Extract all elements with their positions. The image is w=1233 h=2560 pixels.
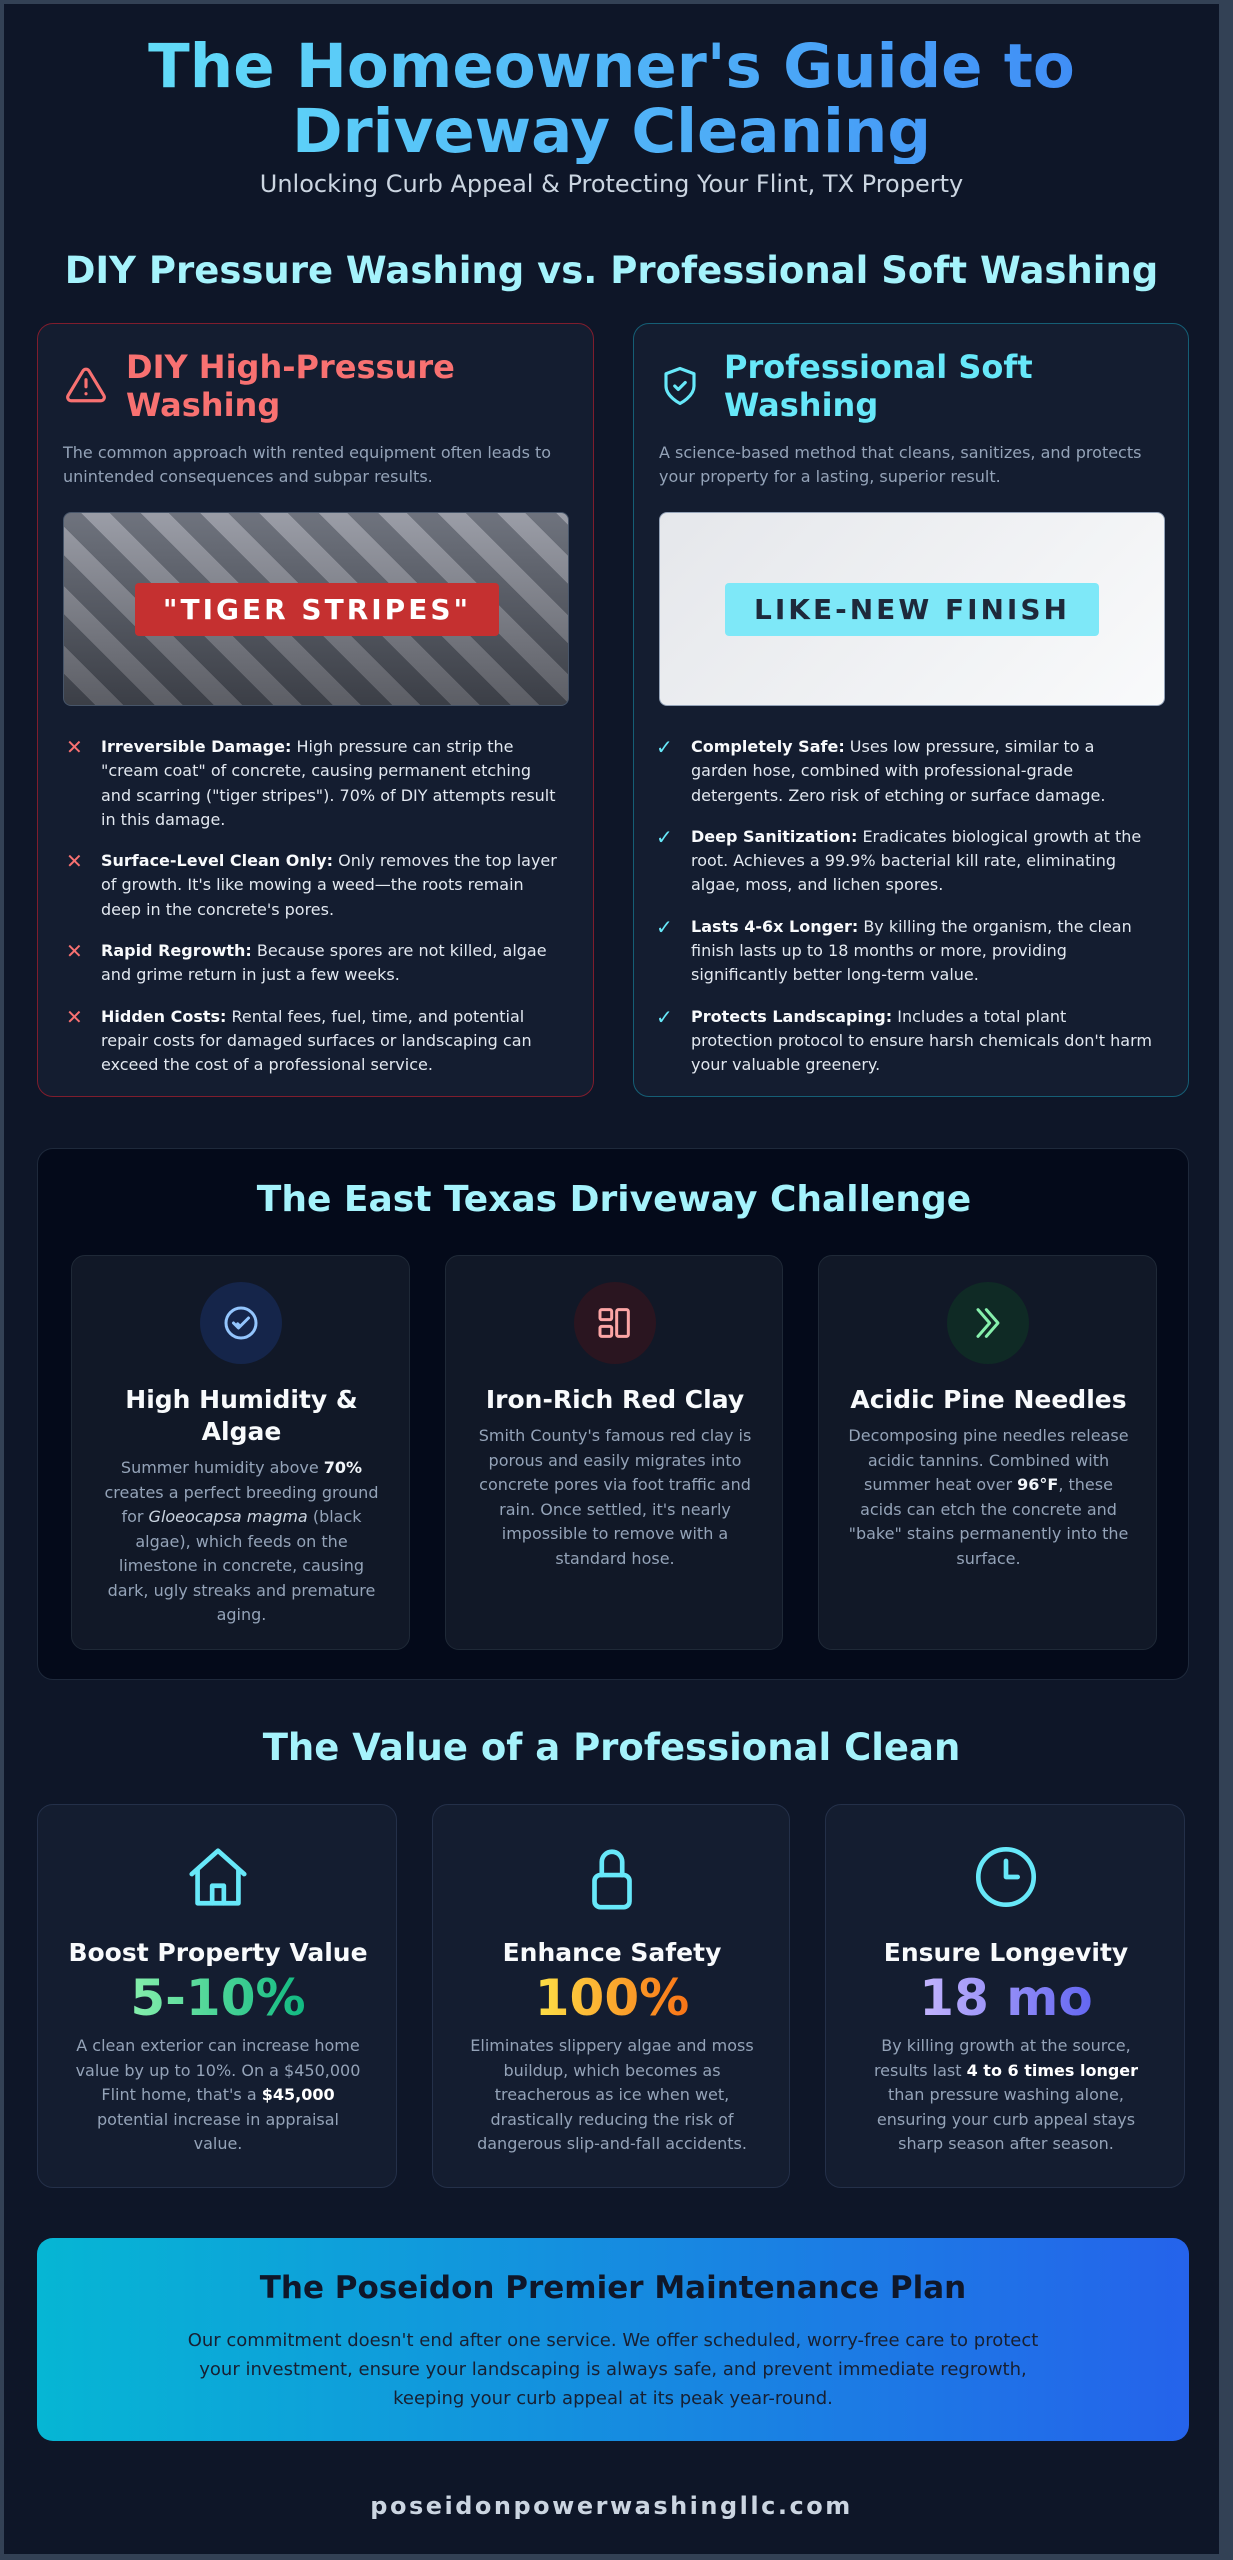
bullet: hidden costs: exceed the cost of a professional service. [101, 1055, 433, 1074]
icon: warning [66, 368, 106, 402]
bullet: protects landscaping: your valuable greenery. [691, 1055, 880, 1074]
callout: maintenance plan [37, 2238, 1189, 2441]
panel: DIY high-pressure washing [37, 323, 594, 1097]
bullet: surface clean: Surface-Level Clean Only: Only removes the top layer [101, 851, 557, 870]
card: red clay [445, 1255, 783, 1650]
text: property value: potential increase in appraisal [97, 2110, 339, 2128]
heading: DIY [126, 348, 455, 424]
title: humidity [125, 1385, 358, 1446]
bullet: deep sanitization: Deep Sanitization: Eradicates biological growth at the [691, 827, 1141, 846]
text: longevity: ensuring your curb appeal stays [877, 2110, 1135, 2128]
heading: professional [724, 348, 1033, 424]
icon: clock [976, 1847, 1036, 1907]
text: pine needles: Decomposing pine needles release acidic tannins. Combined with summer heat over 96°F, these acids can etch the concrete and "bake" stains permanently into the surface. [848, 1426, 1129, 1568]
bullet: surface clean: ✕ [66, 849, 83, 873]
icon: check circle [200, 1282, 282, 1364]
bullet: protects landscaping [656, 1005, 1152, 1074]
card: safety [432, 1804, 790, 2188]
bullet: rapid regrowth: ✕ [66, 939, 83, 963]
title: property value: Boost Property Value [68, 1938, 368, 1967]
list: professional benefits [656, 735, 1152, 1074]
label: tiger stripes: "TIGER STRIPES" [163, 593, 471, 626]
title: humidity: High Humidity & [125, 1385, 358, 1414]
bullet: completely safe: detergents. Zero risk of etching or surface damage. [691, 786, 1105, 805]
bullet: surface clean: deep in the concrete's pores. [101, 900, 334, 919]
title: safety: Enhance Safety [503, 1938, 721, 1967]
text: maintenance plan: Our commitment doesn't end after one service. We offer scheduled, worry-free care to protect your investment, ensure your landscaping is always safe, and prevent immediate regrowth, keeping your curb appeal at its peak year-round. [188, 2330, 1038, 2409]
text: property value: A clean exterior can increase home [76, 2036, 360, 2055]
bullet: completely safe: Completely Safe: Uses low pressure, similar to a [691, 737, 1094, 756]
image: tiger stripes [63, 512, 569, 706]
label: like-new finish: LIKE-NEW FINISH [754, 593, 1070, 626]
text: property value: Flint home, that's a $45,000 [101, 2085, 335, 2104]
card: property value [37, 1804, 397, 2188]
bullet: lasts longer [656, 915, 1132, 984]
text: property value: value by up to 10%. On a $450,000 [76, 2060, 360, 2080]
subtitle: Unlocking Curb Appeal & Protecting Your Flint, TX Property [260, 170, 963, 198]
title: The Homeowner's Guide to [148, 31, 1075, 102]
bullet: surface clean [66, 849, 557, 919]
bullet: deep sanitization: algae, moss, and lichen spores. [691, 875, 943, 894]
bullet: deep sanitization: ✓ [656, 825, 673, 849]
bullet: irreversible damage: ✕ [66, 735, 83, 759]
bullet: hidden costs: repair costs for damaged surfaces or landscaping can [101, 1031, 532, 1050]
icon: shield check [664, 366, 696, 406]
bullet: lasts longer: ✓ [656, 915, 673, 939]
title: pine needles: Acidic Pine Needles [850, 1385, 1127, 1414]
text: longevity [874, 2036, 1138, 2153]
label: like-new finish [725, 583, 1099, 636]
bullet: irreversible damage [66, 735, 556, 829]
list: DIY drawbacks [66, 735, 557, 1074]
bullet: deep sanitization [656, 825, 1141, 894]
bullet: hidden costs: ✕ [66, 1005, 83, 1029]
title: longevity: Ensure Longevity [884, 1938, 1128, 1967]
text: red clay: Smith County's famous red clay is porous and easily migrates into concrete pores via foot traffic and rain. Once settled, it's nearly impossible to remove with a standard hose. [479, 1426, 751, 1568]
bullet: surface clean: of growth. It's like mowing a weed—the roots remain [101, 875, 524, 894]
panel: East Texas challenge [37, 1148, 1189, 1680]
heading: comparison: DIY Pressure Washing vs. Professional Soft Washing [65, 249, 1158, 292]
heading: DIY: DIY High-Pressure [126, 348, 455, 386]
bullet: completely safe: garden hose, combined with professional-grade [691, 761, 1073, 780]
stat: 100%: 100% [535, 1969, 689, 2027]
text: property value [76, 2036, 360, 2153]
heading: professional: Professional Soft [724, 348, 1033, 386]
bullet: irreversible damage: "cream coat" of concrete, causing permanent etching [101, 761, 531, 780]
card: pine needles [818, 1255, 1157, 1650]
footer: website: poseidonpowerwashingllc.com [370, 2492, 853, 2520]
text: DIY intro: The common approach with rented equipment often leads to unintended consequences and subpar results. [63, 443, 551, 486]
icon: chevrons [947, 1282, 1029, 1364]
heading: maintenance plan: The Poseidon Premier Maintenance Plan [260, 2270, 966, 2306]
bullet: protects landscaping: protection protocol to ensure harsh chemicals don't harm [691, 1031, 1152, 1050]
bullet: protects landscaping: Protects Landscaping: Includes a total plant [691, 1007, 1066, 1026]
title [4, 34, 1219, 164]
bullet: lasts longer: finish lasts up to 18 months or more, providing [691, 941, 1067, 960]
icon: lock [592, 1849, 632, 1910]
stat: 5-10%: 5-10% [130, 1969, 306, 2027]
bullet: irreversible damage: Irreversible Damage: High pressure can strip the [101, 737, 513, 756]
text: humidity: Summer humidity above 70% creates a perfect breeding ground for Gloeocapsa magma (black algae), which feeds on the limestone in concrete, causing dark, ugly streaks and premature aging. [104, 1458, 378, 1624]
bullet: irreversible damage: and scarring ("tiger stripes"). 70% of DIY attempts result [101, 786, 556, 805]
card: longevity [825, 1804, 1185, 2188]
bullet: completely safe [656, 735, 1105, 805]
text: professional intro: A science-based method that cleans, sanitizes, and protects your property for a lasting, superior result. [659, 443, 1141, 486]
text: longevity: than pressure washing alone, [888, 2085, 1124, 2104]
bullet: hidden costs [66, 1005, 532, 1074]
heading: DIY: Washing [126, 386, 280, 424]
heading: value: The Value of a Professional Clean [263, 1726, 960, 1769]
title: humidity: Algae [202, 1417, 281, 1446]
bullet: hidden costs: Hidden Costs: Rental fees, fuel, time, and potential [101, 1007, 524, 1026]
stat: 18 mo: 18 mo [919, 1969, 1093, 2027]
bullet: lasts longer: Lasts 4-6x Longer: By killing the organism, the clean [691, 917, 1132, 936]
icon: house [189, 1848, 247, 1906]
text: longevity: sharp season after season. [898, 2134, 1114, 2153]
panel: professional soft washing [633, 323, 1189, 1097]
label: tiger stripes [135, 583, 499, 636]
bullet: completely safe: ✓ [656, 735, 673, 759]
bullet: lasts longer: significantly better long-term value. [691, 965, 979, 984]
bullet: deep sanitization: root. Achieves a 99.9% bacterial kill rate, eliminating [691, 851, 1116, 870]
title: red clay: Iron-Rich Red Clay [486, 1385, 744, 1414]
bullet: rapid regrowth [66, 939, 547, 984]
heading: professional: Washing [724, 386, 878, 424]
bullet: rapid regrowth: and grime return in just a few weeks. [101, 965, 400, 984]
bullet: protects landscaping: ✓ [656, 1005, 673, 1029]
text: property value: value. [194, 2134, 242, 2153]
bullet: rapid regrowth: Rapid Regrowth: Because spores are not killed, algae [101, 941, 547, 960]
title: Driveway Cleaning [292, 96, 931, 167]
text: longevity: By killing growth at the source, [881, 2036, 1131, 2055]
text: safety: Eliminates slippery algae and moss buildup, which becomes as treacherous as ice when wet, drastically reducing the risk of dangerous slip-and-fall accidents. [470, 2036, 754, 2153]
card: humidity [71, 1255, 410, 1650]
image: like-new finish [659, 512, 1165, 706]
heading: challenge: The East Texas Driveway Challenge [257, 1179, 971, 1220]
icon: layout blocks [574, 1282, 656, 1364]
text: longevity: results last 4 to 6 times longer [874, 2060, 1138, 2080]
bullet: irreversible damage: in this damage. [101, 810, 225, 829]
